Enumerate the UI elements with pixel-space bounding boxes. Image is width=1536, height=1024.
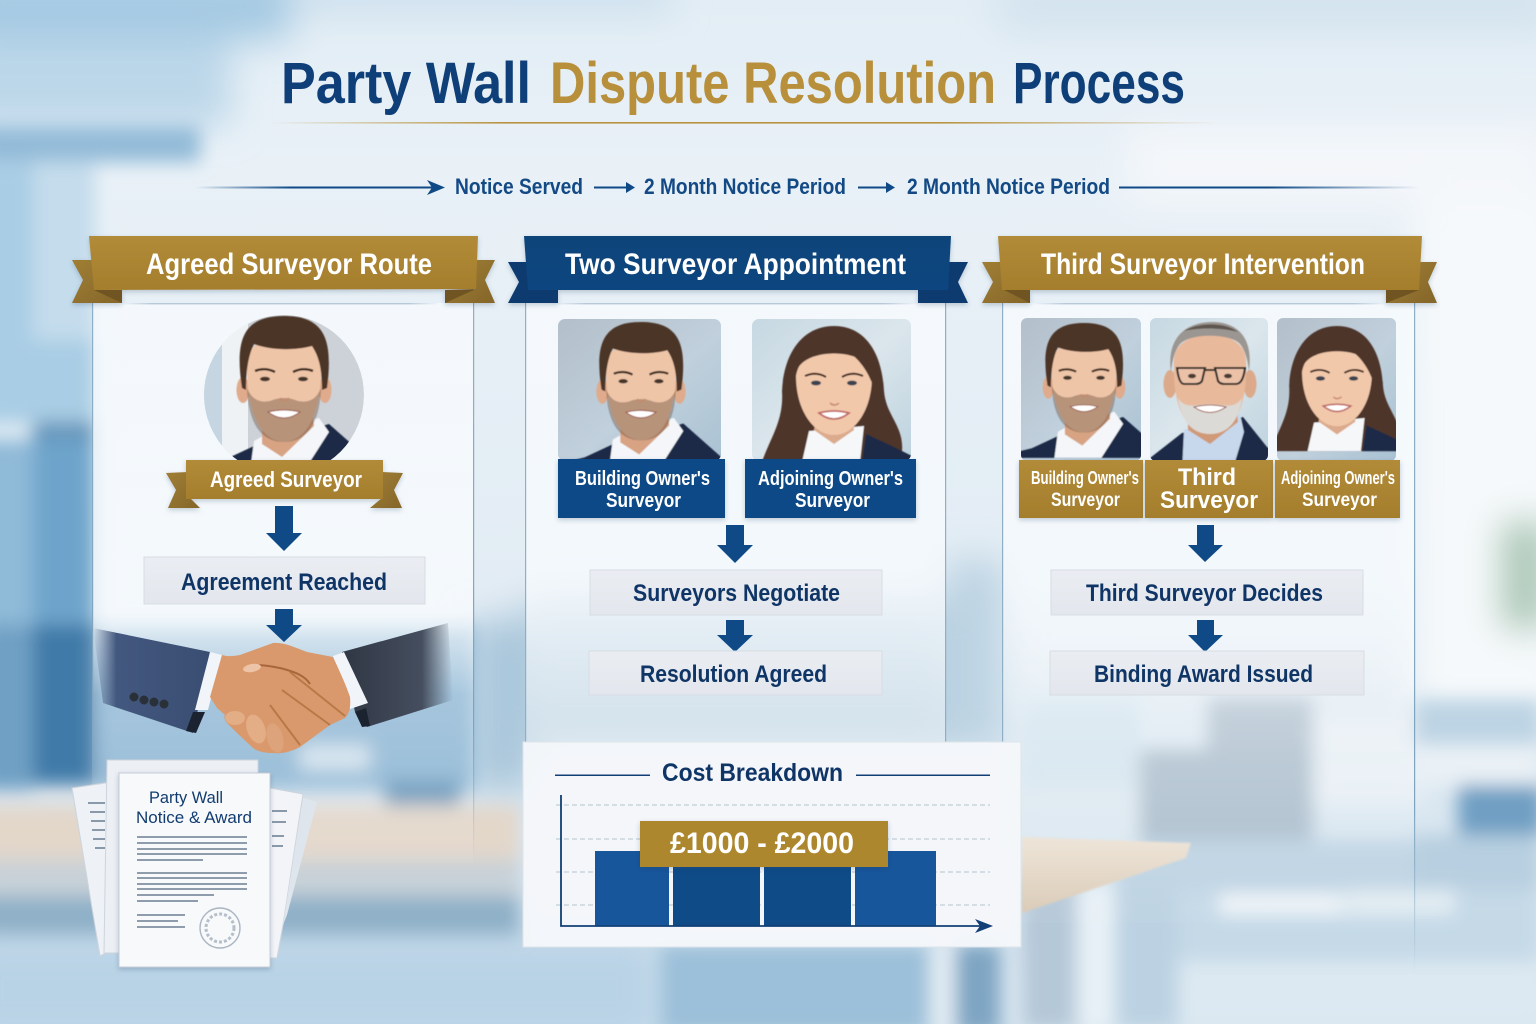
callout: cost range: £1000 - £2000 xyxy=(670,827,854,860)
timeline: 2 Month Notice Period xyxy=(907,174,1110,199)
document stack: party wall notice and award: Party Wall xyxy=(149,788,223,807)
step: third surveyor decides: Third Surveyor Decides xyxy=(1086,580,1323,607)
arrow xyxy=(266,609,302,642)
callout: cost range xyxy=(640,821,888,867)
heading ribbon: two surveyor appointment xyxy=(508,236,968,303)
step: binding award issued xyxy=(1050,651,1364,695)
heading ribbon: agreed surveyor route xyxy=(72,236,495,303)
title: Dispute Resolution xyxy=(550,51,996,116)
label: third surveyor: Surveyor xyxy=(1160,487,1258,514)
portrait: agreed surveyor xyxy=(204,315,364,460)
label: third surveyor xyxy=(1145,460,1273,518)
heading ribbon: third surveyor intervention: Third Surveyor Intervention xyxy=(1041,248,1365,281)
label: third surveyor: Third xyxy=(1178,464,1236,491)
step: surveyors negotiate: Surveyors Negotiate xyxy=(633,580,840,607)
label: building owner's surveyor xyxy=(1019,460,1143,518)
label: building owner's surveyor: Surveyor xyxy=(1051,490,1121,511)
label: adjoining owner's surveyor xyxy=(1275,460,1400,518)
step: agreement reached: Agreement Reached xyxy=(181,569,387,596)
step: resolution agreed xyxy=(589,651,882,695)
portrait: building owner's surveyor xyxy=(558,319,721,459)
step: third surveyor decides xyxy=(1051,570,1363,615)
arrow xyxy=(717,525,753,563)
portrait: adjoining owner's surveyor xyxy=(752,319,924,462)
document stack: party wall notice and award xyxy=(72,760,317,967)
step: surveyors negotiate xyxy=(590,570,882,615)
label: building owner's surveyor: Building Owner's xyxy=(575,468,710,490)
icon: handshake xyxy=(93,623,453,755)
panel: cost breakdown xyxy=(523,742,1021,947)
label ribbon: agreed surveyor xyxy=(166,460,403,508)
panel: two surveyor appointment xyxy=(508,236,968,743)
heading ribbon: third surveyor intervention xyxy=(982,236,1437,303)
heading: cost breakdown: Cost Breakdown xyxy=(662,759,843,787)
panel: third surveyor intervention xyxy=(982,236,1437,973)
arrow xyxy=(266,506,302,551)
step: resolution agreed: Resolution Agreed xyxy=(640,661,827,688)
portrait: adjoining owner's surveyor xyxy=(1277,318,1396,460)
document stack: party wall notice and award: Notice & Award xyxy=(136,808,252,827)
step: binding award issued: Binding Award Issued xyxy=(1094,661,1313,688)
timeline: Notice Served xyxy=(455,174,583,199)
heading ribbon: two surveyor appointment: Two Surveyor Appointment xyxy=(565,248,906,281)
timeline xyxy=(195,174,1419,199)
portrait: third surveyor xyxy=(1150,318,1268,460)
step: agreement reached xyxy=(144,557,425,604)
label: adjoining owner's surveyor xyxy=(745,459,916,518)
title: Party Wall xyxy=(281,51,531,116)
timeline: 2 Month Notice Period xyxy=(644,174,846,199)
bar chart xyxy=(556,795,993,933)
label: building owner's surveyor: Building Owner's xyxy=(1031,468,1139,488)
label: adjoining owner's surveyor: Surveyor xyxy=(795,490,870,512)
heading ribbon: agreed surveyor route: Agreed Surveyor Route xyxy=(146,248,432,281)
label: adjoining owner's surveyor: Adjoining Owner's xyxy=(758,468,903,490)
label ribbon: agreed surveyor: Agreed Surveyor xyxy=(210,467,362,492)
label: adjoining owner's surveyor: Surveyor xyxy=(1302,490,1378,511)
arrow xyxy=(1188,620,1223,652)
portrait: building owner's surveyor xyxy=(1021,318,1141,460)
arrow xyxy=(717,620,753,652)
title xyxy=(270,51,1220,124)
label: building owner's surveyor xyxy=(558,459,725,518)
label: adjoining owner's surveyor: Adjoining Owner's xyxy=(1281,468,1395,488)
panel: agreed surveyor route xyxy=(72,236,495,967)
title: Process xyxy=(1013,51,1185,116)
arrow xyxy=(1188,525,1223,562)
label: building owner's surveyor: Surveyor xyxy=(606,490,681,512)
